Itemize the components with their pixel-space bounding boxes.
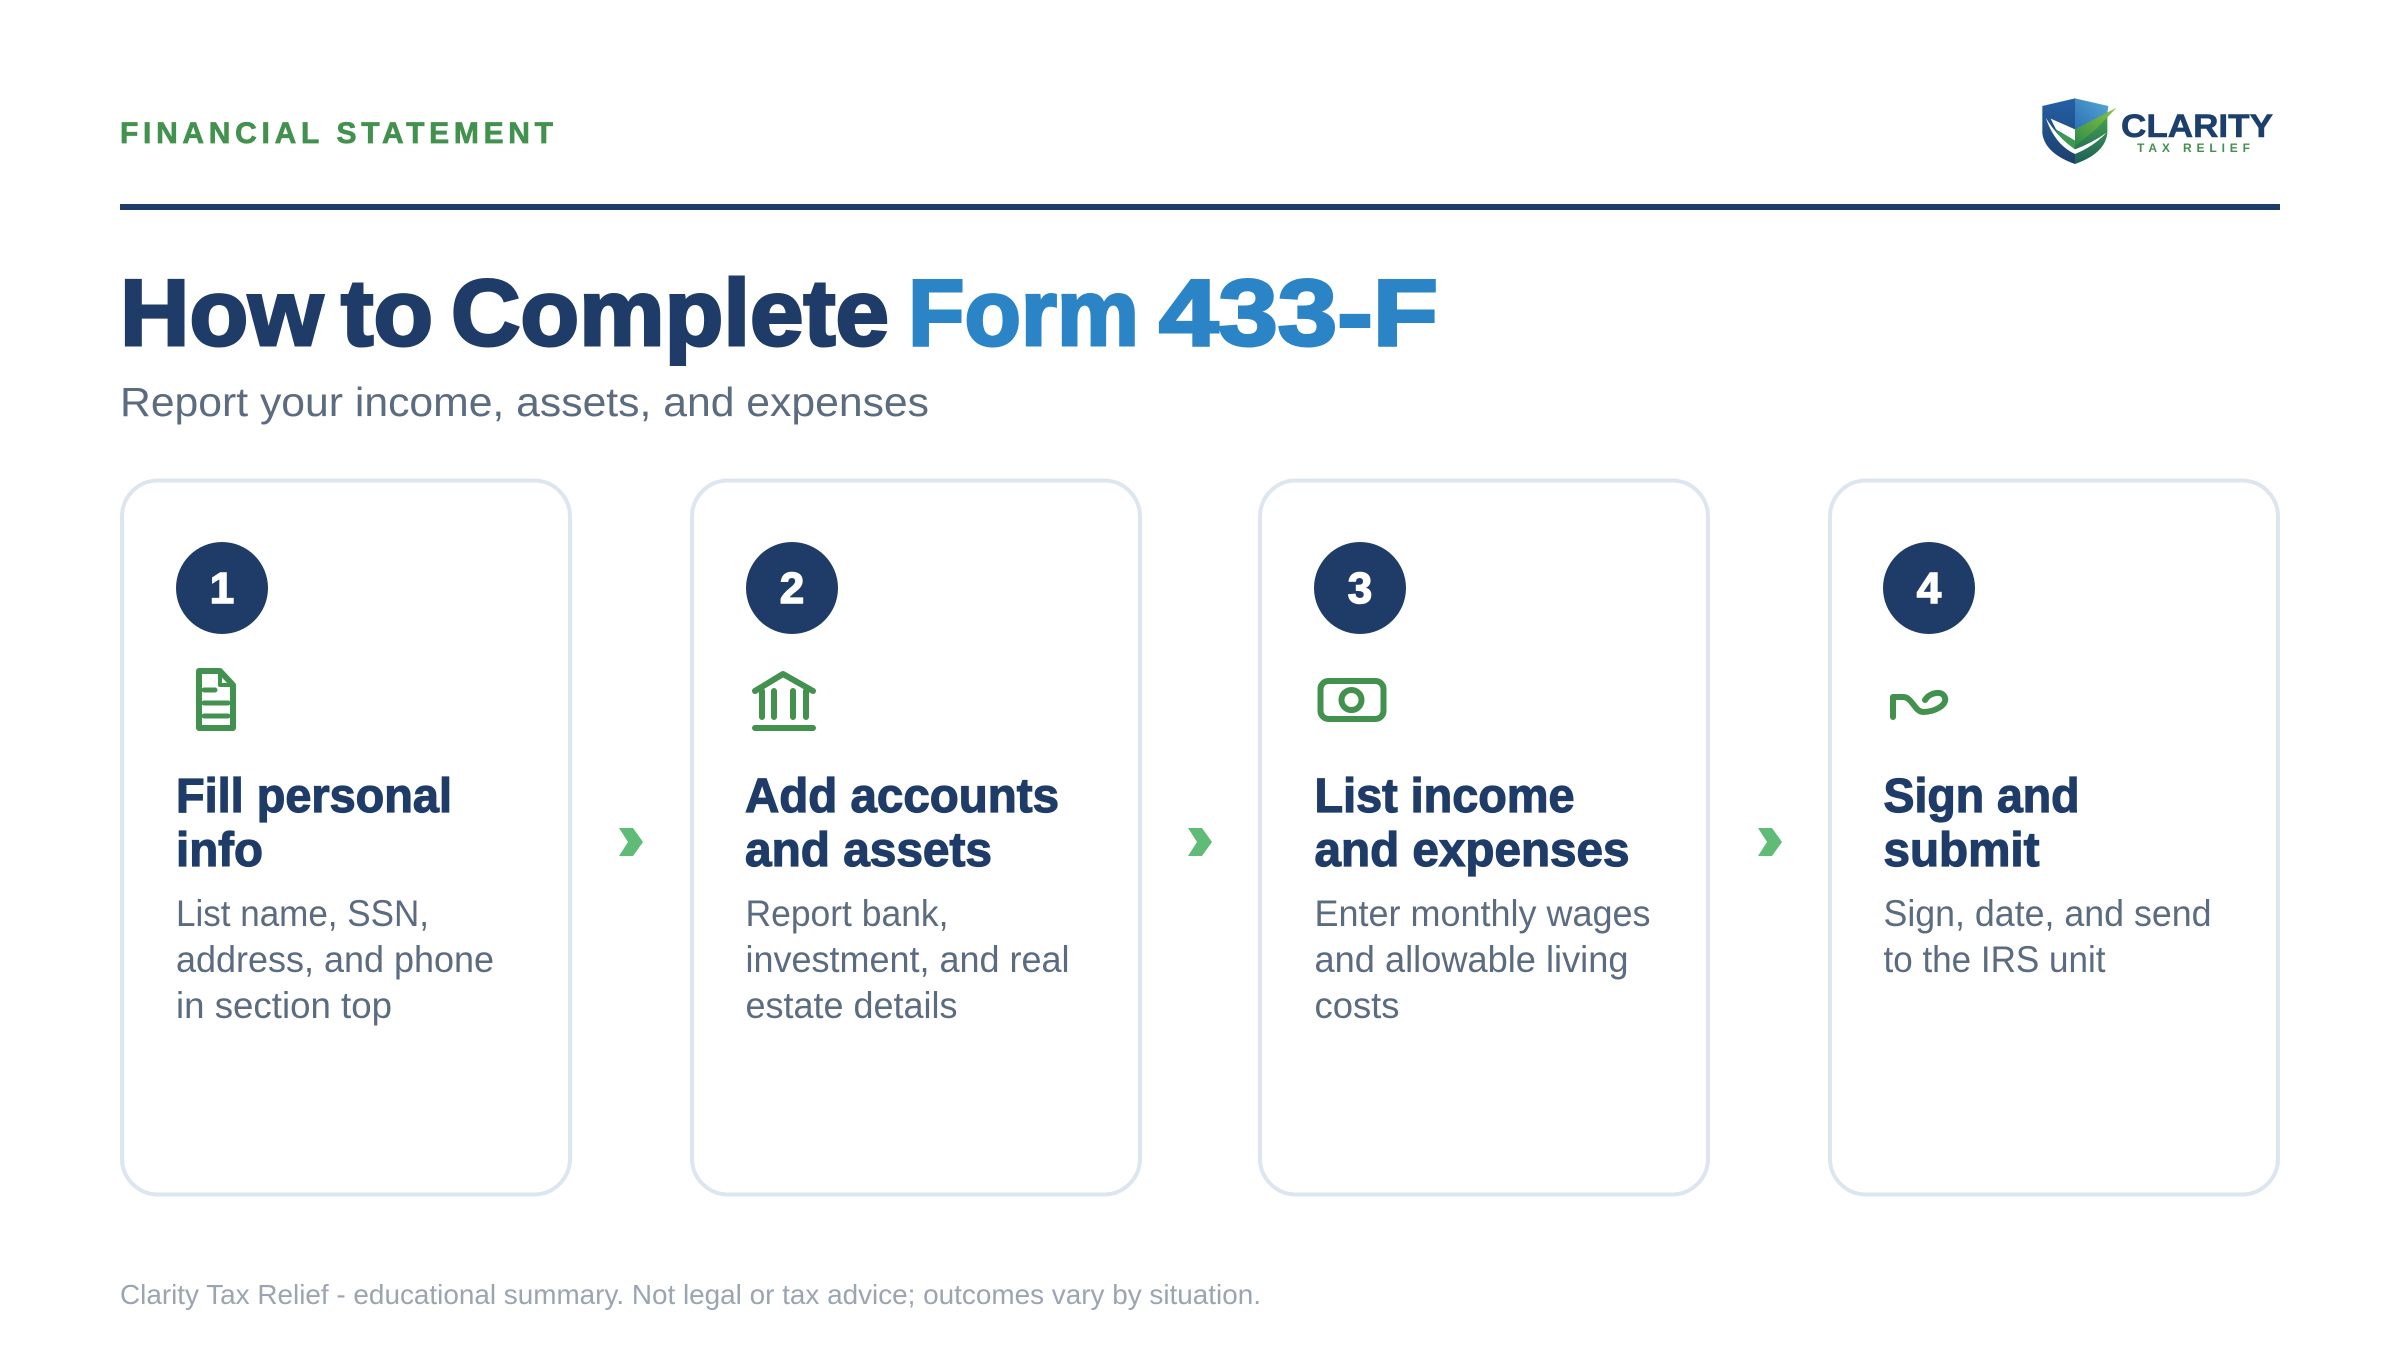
heading: and expenses [1314,824,1630,877]
header rule [120,204,2280,210]
step number 3 [1314,542,1406,634]
icon: banknote [1320,681,1384,719]
heading: Fill personal [176,770,452,823]
body text: Sign, date, and send [1884,893,2212,934]
step number 3: 3 [1348,564,1372,613]
icon: bank [755,674,813,728]
logo: Clarity Tax Relief [2042,98,2273,164]
icon: document [199,671,233,728]
eyebrow label: FINANCIAL STATEMENT [120,117,553,150]
body text: address, and phone [176,939,494,980]
body text: in section top [176,985,392,1026]
body text: to the IRS unit [1884,939,2106,980]
step number 4: 4 [1917,564,1942,613]
heading: List income [1314,770,1574,823]
heading: submit [1884,824,2040,877]
heading: and assets [745,824,992,877]
arrow 3 to 4 [1758,828,1782,856]
heading: Sign and [1884,770,2080,823]
title: to [341,260,433,365]
panel: step 1 [122,480,570,1194]
step number 2: 2 [780,564,804,613]
icon: shield [2042,98,2117,164]
body text: estate details [746,985,958,1026]
logo wordmark: CLARITY [2121,108,2273,144]
arrow 2 to 3 [1188,828,1212,856]
body text: and allowable living [1314,939,1628,980]
heading: info [176,824,263,877]
panel: step 3 [1260,480,1708,1194]
body text: Enter monthly wages [1314,893,1650,934]
step number 1 [176,542,268,634]
title [120,260,1438,365]
title: How [120,260,324,365]
body text: Report bank, [746,893,948,934]
icon: signature [1893,693,1945,717]
logo tagline: TAX RELIEF [2137,141,2250,155]
title: 433-F [1159,260,1438,365]
step number 2 [746,542,838,634]
step number 1: 1 [210,564,234,613]
footer disclaimer: Clarity Tax Relief - educational summary. Not legal or tax advice; outcomes vary by situation. [120,1279,1261,1310]
panel: step 2 [692,480,1140,1194]
step number 4 [1883,542,1975,634]
body text: investment, and real [746,939,1070,980]
heading: Add accounts [745,770,1059,823]
title: Complete [451,260,889,365]
body text: costs [1314,985,1400,1026]
body text: List name, SSN, [176,893,429,934]
title: Form [908,260,1139,365]
arrow 1 to 2 [619,828,643,856]
subtitle: Report your income, assets, and expenses [120,379,929,425]
panel: step 4 [1830,480,2278,1194]
